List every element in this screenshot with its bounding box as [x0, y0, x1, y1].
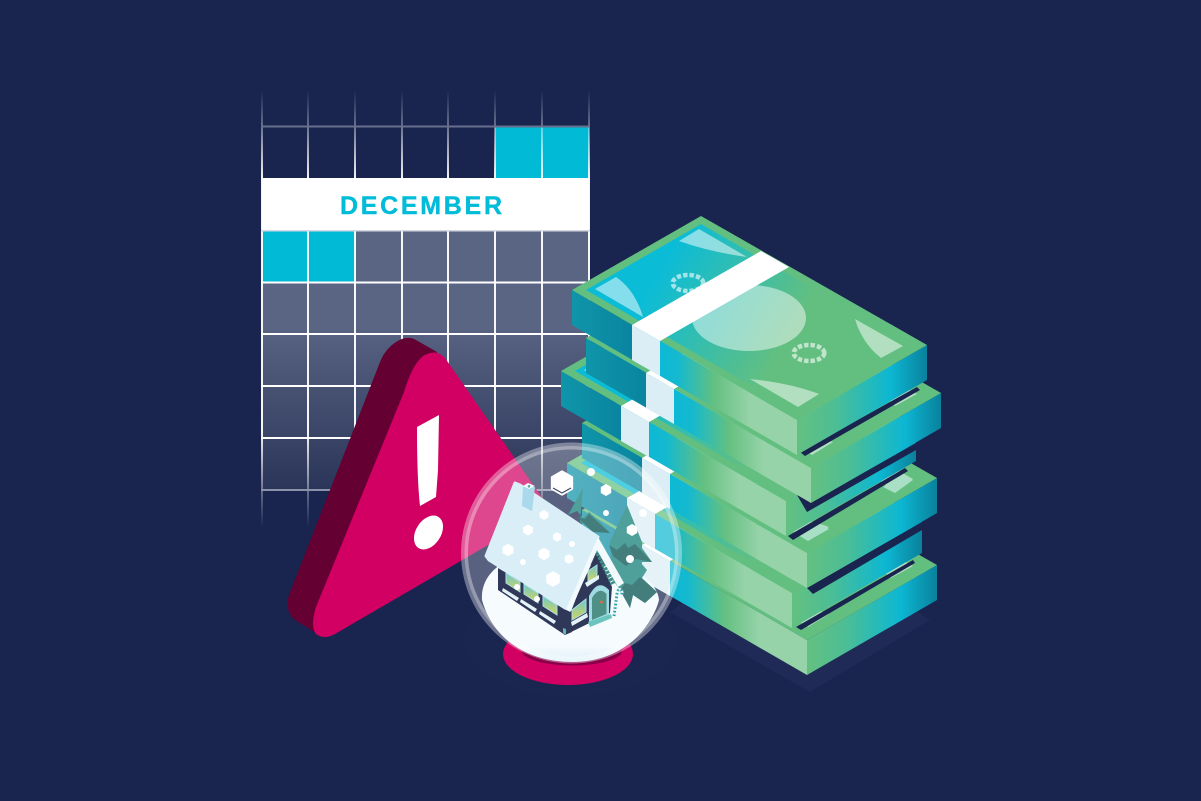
highlighted cells top row — [495, 127, 589, 178]
triangle side — [287, 338, 437, 633]
shadow strip 3 — [788, 468, 908, 540]
roof eave — [566, 537, 624, 612]
glass — [464, 446, 678, 660]
bundle 5 — [567, 389, 922, 628]
right wall window — [571, 599, 588, 626]
left wall — [498, 568, 572, 635]
warning triangle — [287, 338, 550, 637]
month label: DECEMBER — [340, 192, 502, 220]
snow mound — [482, 565, 659, 662]
base shadow — [522, 636, 622, 666]
shadow strip 4 — [807, 522, 922, 594]
corner post — [563, 628, 566, 635]
light note corner 4 — [798, 523, 829, 541]
shadow strip 2 — [797, 443, 916, 512]
glass ring — [464, 446, 678, 660]
bundle 3 — [561, 297, 916, 536]
door — [588, 585, 612, 627]
bundle 6 — [582, 436, 937, 675]
snowflakes — [503, 468, 647, 602]
triangle front — [313, 352, 550, 637]
month banner — [262, 178, 589, 230]
calendar grey day cells — [262, 230, 589, 490]
front tree — [609, 505, 657, 608]
shadow strip 5 — [796, 560, 915, 630]
house — [486, 483, 624, 635]
snow globe — [464, 446, 678, 685]
highlighted cells first week — [262, 231, 355, 282]
garland — [598, 553, 613, 584]
globe ground shadow — [464, 584, 676, 696]
big flake shading — [553, 488, 571, 493]
candy cane — [614, 590, 622, 616]
globe base — [503, 623, 633, 685]
roof — [486, 483, 598, 610]
stack of banknotes — [561, 216, 941, 675]
ground shadow — [670, 590, 930, 692]
light note corner 4b — [883, 475, 913, 493]
right wall — [565, 552, 612, 635]
exclamation mark — [408, 415, 449, 555]
chimney — [522, 483, 535, 511]
calendar — [261, 90, 590, 528]
left wall windows — [502, 573, 557, 624]
gable window — [585, 565, 599, 587]
shadow strip 1 — [800, 387, 920, 456]
back tree — [568, 488, 610, 533]
bundle 4 — [582, 349, 937, 588]
bundle 2 — [586, 264, 941, 503]
bundle 1 — [572, 216, 927, 455]
